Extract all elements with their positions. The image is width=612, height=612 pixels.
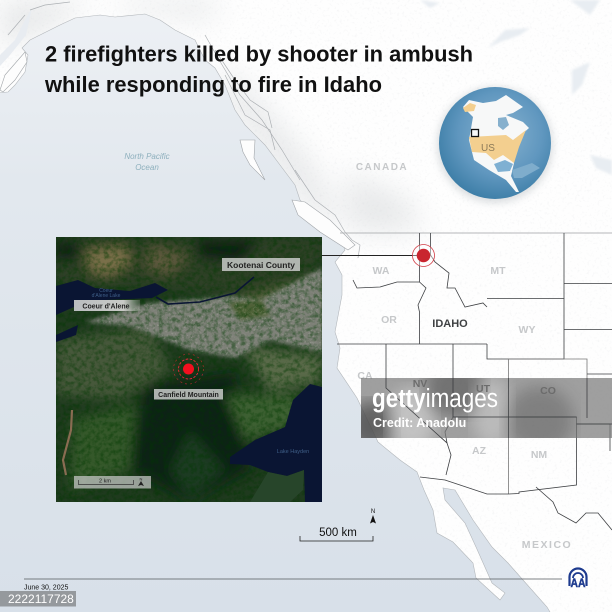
label: lake names: Coeur [99, 288, 113, 294]
label: Coeur d'Alene [74, 300, 140, 311]
getty watermark band [361, 378, 612, 444]
locator globe [437, 87, 553, 203]
inset scale bar [74, 476, 151, 488]
Caribbean [512, 163, 540, 178]
label: NM: NM [531, 449, 547, 461]
main map scale bar [300, 509, 376, 541]
Alaska [463, 103, 476, 112]
label: US: US [481, 143, 495, 154]
Lake Coeur d'Alene [56, 280, 168, 315]
watermark credit: Credit: Anadolu [373, 416, 466, 430]
label: North Pacific Ocean: North Pacific [124, 152, 170, 161]
satellite inset map [56, 237, 322, 502]
river valley [63, 410, 72, 475]
place labels [124, 152, 572, 551]
lakes [56, 277, 322, 502]
label: Mexico: MEXICO [522, 539, 572, 551]
Anadolu logo [570, 568, 586, 590]
contiguous US [469, 130, 526, 163]
band borders [386, 378, 612, 443]
title [44, 42, 473, 97]
Spokane river [156, 277, 254, 304]
image id tag: 2222117728 [8, 592, 74, 606]
band state labels: UT [476, 383, 491, 395]
inset scale bar: N [140, 476, 143, 482]
main map scale bar: N [371, 509, 375, 515]
peninsula [250, 470, 304, 502]
title: while responding to fire in Idaho [44, 72, 382, 97]
Gulf of Mexico [494, 160, 513, 172]
title: 2 firefighters killed by shooter in ambush [45, 42, 473, 66]
watermark brand: gettyimages [372, 385, 498, 413]
label: AZ: AZ [472, 445, 487, 457]
label: Canfield Mountain: Canfield Mountain [158, 392, 219, 399]
leader line [322, 254, 423, 256]
state and country borders [337, 233, 612, 530]
forest texture [56, 237, 322, 502]
city texture [94, 269, 322, 356]
bristol bay [0, 8, 32, 66]
label: CA: CA [357, 370, 373, 382]
city [85, 268, 322, 358]
Hudson Bay [498, 117, 509, 130]
label: lake names: Lake Hayden [277, 449, 309, 455]
date: June 30, 2025 [24, 584, 68, 592]
North America land [463, 95, 529, 192]
label: Coeur d'Alene: Coeur d'Alene [82, 304, 130, 310]
label: lake names [92, 288, 309, 455]
footer rule [24, 578, 562, 580]
label: Kootenai County: Kootenai County [227, 260, 295, 270]
mountain shading [0, 0, 420, 232]
label: North Pacific Ocean: Ocean [135, 163, 159, 172]
label: lake names: d'Alene Lake [92, 293, 121, 299]
label: Idaho: IDAHO [432, 318, 468, 330]
label: Canfield Mountain [154, 389, 223, 400]
label: Canada: CANADA [356, 162, 408, 173]
label: Kootenai County [222, 258, 300, 271]
inset location marker [174, 354, 204, 384]
band state labels: NV [413, 378, 427, 390]
inset scale bar: 2 km [99, 478, 111, 484]
band state labels [413, 378, 556, 397]
locator square [472, 130, 478, 136]
Lake Hayden [230, 384, 322, 502]
main map scale bar: 500 km [319, 527, 357, 539]
band state labels: CO [540, 385, 556, 397]
label: OR: OR [381, 314, 397, 326]
lakes [420, 0, 612, 175]
islands [0, 52, 355, 250]
label: MT: MT [490, 265, 506, 277]
location marker on main map [412, 244, 434, 266]
fjord coast detail [8, 2, 360, 258]
label: WY: WY [519, 324, 535, 336]
label: WA: WA [373, 265, 390, 277]
Anadolu logo: AA [570, 576, 586, 590]
